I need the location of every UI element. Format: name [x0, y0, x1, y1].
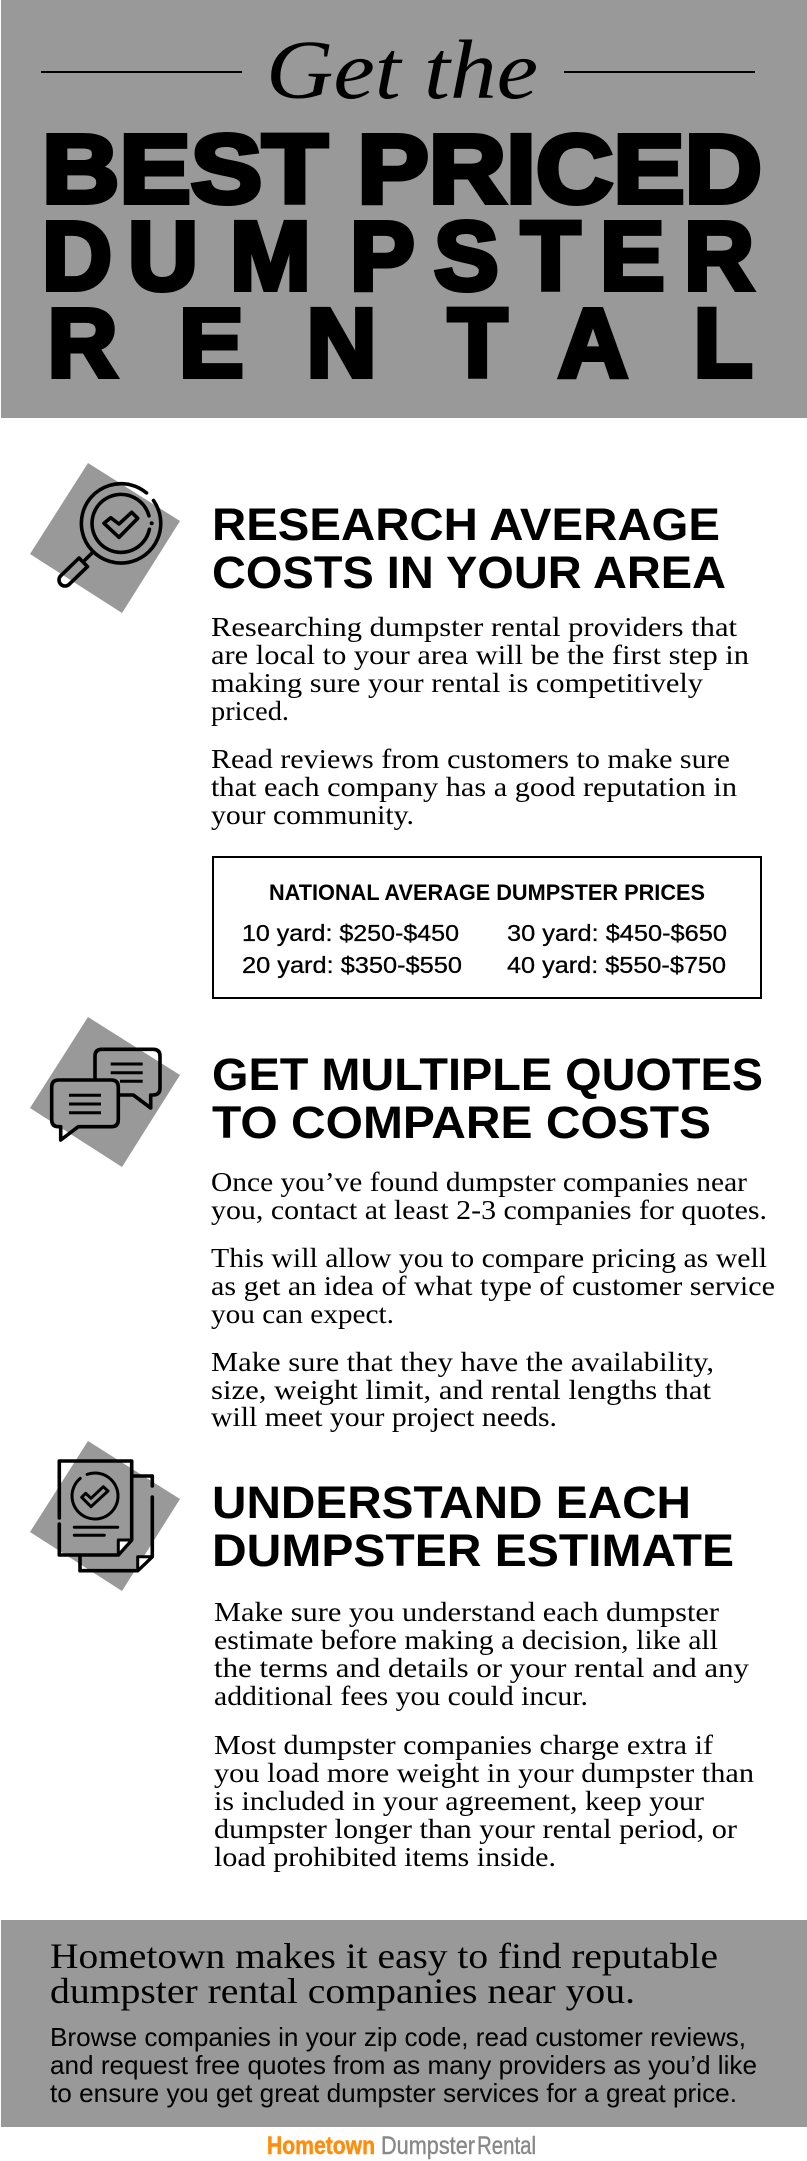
- logo: hometown dumpster rental: Rental: [477, 2132, 536, 2160]
- heading: understand each estimate: [212, 1477, 734, 1576]
- text block: researching providers: are local to your area will be the first step in: [211, 640, 750, 670]
- icon: documents with check: [30, 1441, 180, 1591]
- text block: compare pricing: as get an idea of what type of customer service: [211, 1271, 775, 1301]
- text block: once you've found: you, contact at least 2-3 companies for quotes.: [211, 1195, 767, 1225]
- logo: hometown dumpster rental: Hometown: [267, 2132, 375, 2160]
- text block: once you've found: Once you’ve found dumpster companies near: [211, 1167, 747, 1197]
- panel: estimate section: [30, 1441, 755, 1872]
- text block: understand estimate: estimate before making a decision, like all: [214, 1625, 718, 1655]
- logo: hometown dumpster rental: [267, 2132, 536, 2160]
- price list: [242, 920, 727, 978]
- icon: chat bubbles: [30, 1017, 180, 1167]
- heading: get multiple quotes: TO COMPARE COSTS: [212, 1097, 711, 1148]
- text block: extra charges: you load more weight in your dumpster than: [214, 1758, 755, 1788]
- text block: researching providers: [211, 612, 750, 726]
- heading: get multiple quotes: GET MULTIPLE QUOTES: [212, 1049, 763, 1100]
- text block: compare pricing: [211, 1243, 775, 1329]
- heading: understand each estimate: DUMPSTER ESTIMATE: [212, 1525, 734, 1576]
- text block: read reviews: Read reviews from customers to make sure: [211, 744, 730, 774]
- text block: researching providers: making sure your rental is competitively: [211, 668, 704, 698]
- text block: read reviews: your community.: [211, 800, 414, 830]
- text block: read reviews: that each company has a good reputation in: [211, 772, 738, 802]
- text block: understand estimate: Make sure you understand each dumpster: [214, 1597, 719, 1627]
- text block: understand estimate: the terms and details or your rental and any: [214, 1653, 750, 1683]
- panel: header: [1, 0, 807, 418]
- heading: research average costs: COSTS IN YOUR AREA: [212, 547, 726, 598]
- text block: availability: Make sure that they have the availability,: [211, 1347, 714, 1377]
- text block: understand estimate: additional fees you could incur.: [214, 1681, 588, 1711]
- panel: footer call to action: [1, 1920, 807, 2127]
- heading: hometown makes it easy: dumpster rental companies near you.: [50, 1971, 635, 2011]
- text block: understand estimate: [214, 1597, 750, 1711]
- heading: hometown makes it easy: Hometown makes it easy to find reputable: [50, 1936, 718, 1976]
- heading: research average costs: [212, 499, 726, 598]
- heading: get multiple quotes: [212, 1049, 763, 1148]
- price list: 30 yard: $450-$650: [507, 920, 727, 946]
- logo: hometown dumpster rental: Dumpster: [381, 2132, 475, 2160]
- text block: extra charges: load prohibited items inside.: [214, 1842, 556, 1872]
- text block: researching providers: Researching dumpster rental providers that: [211, 612, 738, 642]
- text block: compare pricing: This will allow you to compare pricing as well: [211, 1243, 767, 1273]
- text block: browse companies: [50, 2022, 757, 2108]
- text block: extra charges: is included in your agreement, keep your: [214, 1786, 704, 1816]
- heading: Get the: Get the: [266, 24, 538, 117]
- price list: 20 yard: $350-$550: [242, 952, 462, 978]
- price list: 40 yard: $550-$750: [507, 952, 726, 978]
- panel: research section: [30, 463, 761, 998]
- text block: compare pricing: you can expect.: [211, 1299, 394, 1329]
- title: best priced dumpster rental: [42, 114, 762, 398]
- text block: availability: will meet your project needs.: [211, 1402, 557, 1432]
- text block: researching providers: priced.: [211, 696, 289, 726]
- text block: browse companies: Browse companies in your zip code, read customer reviews,: [50, 2022, 746, 2052]
- text block: availability: [211, 1347, 714, 1432]
- text block: browse companies: to ensure you get great dumpster services for a great price.: [50, 2078, 737, 2108]
- text block: extra charges: [214, 1730, 755, 1872]
- title: best priced dumpster rental: RENTAL: [48, 288, 753, 398]
- price list: 10 yard: $250-$450: [242, 920, 459, 946]
- text block: browse companies: and request free quotes from as many providers as you’d like: [50, 2050, 757, 2080]
- callout title: NATIONAL AVERAGE DUMPSTER PRICES: [269, 880, 705, 905]
- heading: hometown makes it easy: [50, 1936, 718, 2011]
- heading: research average costs: RESEARCH AVERAGE: [212, 499, 720, 550]
- title: best priced dumpster rental: DUMPSTER: [42, 202, 754, 310]
- panel: quotes section: [30, 1017, 775, 1432]
- heading: understand each estimate: UNDERSTAND EACH: [212, 1477, 691, 1528]
- text block: availability: size, weight limit, and rental lengths that: [211, 1375, 712, 1405]
- text block: read reviews: [211, 744, 738, 830]
- title: best priced dumpster rental: BEST PRICED: [42, 114, 762, 224]
- callout: national average dumpster prices: [213, 857, 761, 998]
- text block: extra charges: dumpster longer than your rental period, or: [214, 1814, 737, 1844]
- text block: extra charges: Most dumpster companies charge extra if: [214, 1730, 713, 1760]
- text block: once you've found: [211, 1167, 767, 1225]
- icon: magnifying glass: [30, 463, 180, 613]
